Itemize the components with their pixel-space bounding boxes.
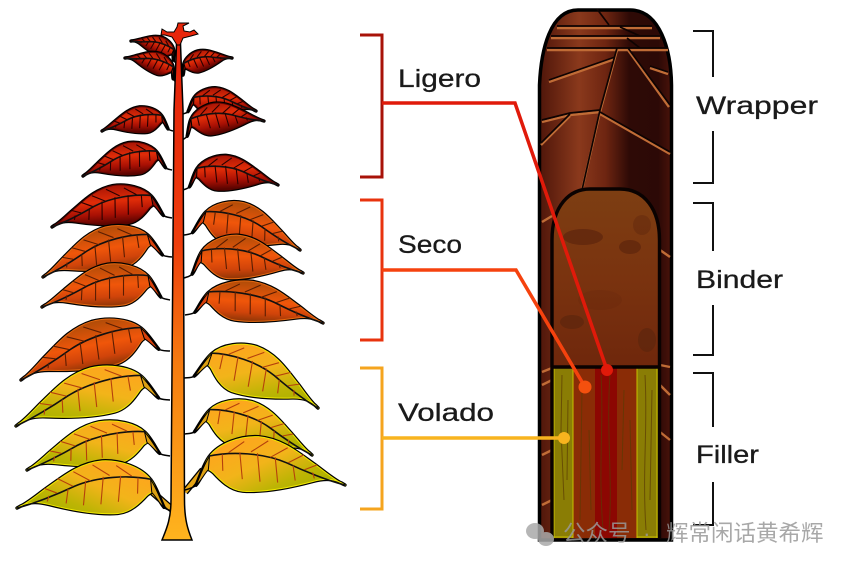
leaf: ligero left fourth: [49, 181, 172, 230]
watermark text: 公众号: [563, 521, 631, 546]
leaf: seco right first: [184, 195, 305, 253]
leaf: seco right second: [182, 232, 303, 281]
leaf: seco left third: [12, 308, 171, 383]
bracket: volado: [360, 368, 382, 509]
bracket: wrapper: [693, 31, 713, 183]
cigar: [540, 9, 672, 540]
leaf: ligero top left upper: [130, 26, 184, 64]
leader line: seco: [382, 270, 592, 394]
bracket: seco: [360, 200, 382, 340]
label: Wrapper: Wrapper: [696, 92, 818, 120]
leaf: ligero top left lower: [124, 41, 184, 83]
leaf: ligero right third: [176, 93, 264, 142]
leaf: ligero top right: [173, 40, 232, 79]
wrapper body: [540, 10, 672, 540]
leader line: ligero: [382, 103, 613, 376]
label: Binder: Binder: [696, 266, 783, 294]
label: Seco: Seco: [398, 231, 462, 259]
bracket: ligero: [360, 35, 382, 177]
leaf: volado left third: [17, 459, 176, 515]
label: Filler: Filler: [696, 441, 759, 469]
leaf: volado left first: [8, 356, 171, 429]
plant flower: [161, 23, 198, 45]
wrapper veins: [541, 9, 670, 505]
binder outline: [552, 189, 660, 538]
label: Ligero: Ligero: [398, 65, 481, 93]
bracket: binder: [693, 203, 713, 355]
leaf: seco left first: [37, 217, 172, 280]
leaf: ligero left second: [102, 107, 173, 133]
leaf: volado right first: [183, 332, 328, 411]
petiole: lower right: [185, 470, 203, 492]
bracket: filler: [693, 373, 713, 525]
watermark: [526, 521, 824, 546]
watermark text: 辉常闲话黄希辉: [666, 521, 824, 546]
watermark text: ·: [643, 521, 650, 546]
leaf: ligero left third: [81, 140, 172, 178]
binder mottling: [560, 215, 656, 352]
label: Volado: Volado: [398, 399, 494, 427]
leaf: seco right third: [185, 277, 326, 326]
leaf: ligero right fourth: [181, 153, 278, 192]
binder layer: [553, 190, 658, 367]
leaf: volado left second: [23, 415, 170, 473]
leaf: volado right third: [183, 434, 345, 494]
filler layer: [553, 367, 658, 538]
plant stem: [162, 44, 192, 540]
petiole: lower left: [143, 484, 175, 512]
leader line: volado: [382, 432, 570, 444]
tobacco plant: [8, 23, 345, 540]
icon: chat bubbles: [526, 523, 554, 546]
leaf: ligero right second: [182, 86, 256, 116]
leaf: volado right second: [185, 391, 319, 458]
leaf: seco left second: [40, 261, 170, 310]
